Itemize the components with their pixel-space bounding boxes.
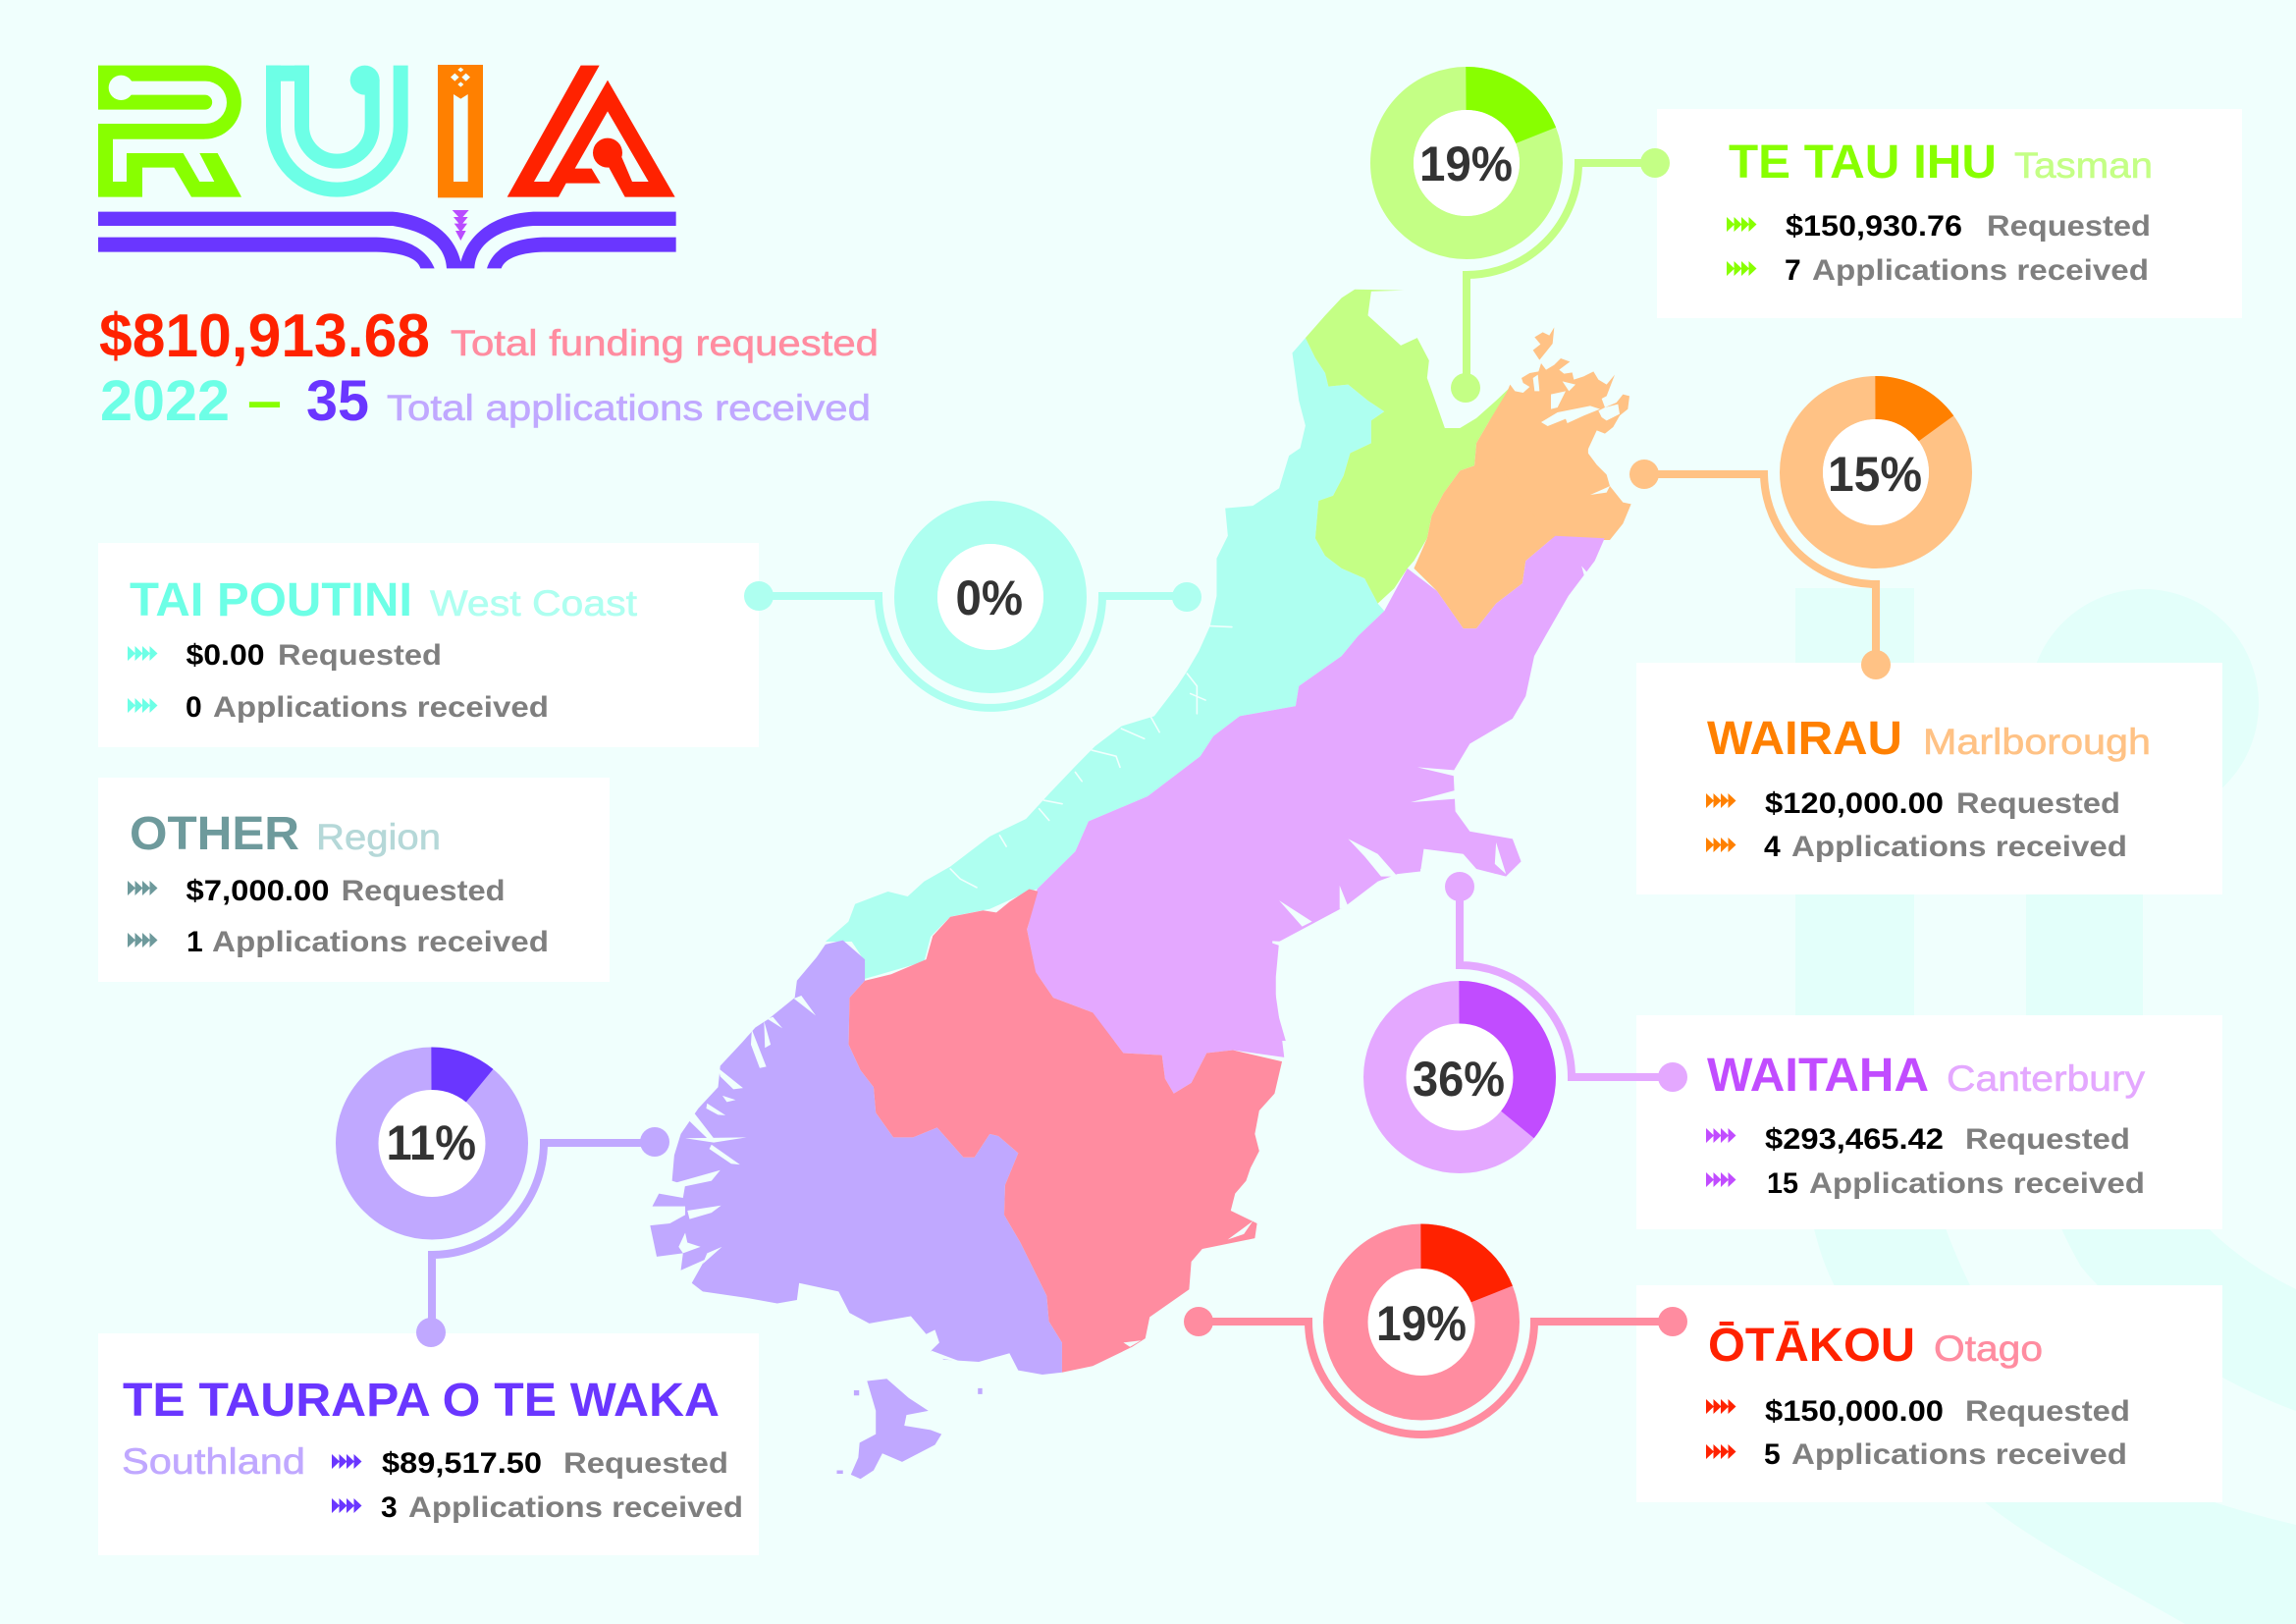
heading [130, 574, 638, 626]
connector [416, 1127, 669, 1347]
heading: OTHER [130, 808, 299, 860]
heading [1729, 136, 2153, 189]
heading: WAIRAU [1707, 713, 1902, 765]
stat: requested [128, 875, 506, 907]
logo book [98, 210, 676, 268]
stat: applications [1706, 1167, 2145, 1200]
heading: Canterbury [1947, 1058, 2146, 1099]
stat: applications: Applications received [1809, 1167, 2145, 1200]
panel: Te Tau Ihu [1657, 109, 2242, 318]
stat: applications: 5 [1764, 1438, 1781, 1471]
stat: requested: Requested [342, 875, 506, 907]
heading [130, 808, 441, 860]
connector [1184, 1307, 1687, 1435]
stat: requested [128, 639, 442, 672]
background pale bands [1795, 588, 2296, 1624]
total funding line: Total funding requested [451, 323, 879, 363]
donut: Tai Poutini 0%: 0% [956, 570, 1023, 625]
stat: applications: 3 [381, 1491, 398, 1524]
stat: requested [1706, 787, 2120, 820]
stat: requested [332, 1447, 728, 1480]
donut: Wairau 15%: 15% [1828, 447, 1922, 502]
stat: applications: 1 [187, 926, 203, 958]
stat: requested [1706, 1123, 2130, 1156]
connector [1445, 872, 1687, 1092]
donut: Wairau 15% [1629, 398, 1950, 679]
stat: requested: $7,000.00 [187, 875, 330, 907]
stat: applications: 7 [1785, 254, 1801, 287]
donut: Te Taurapa 11%: 11% [387, 1115, 476, 1170]
stat: applications: Applications received [212, 926, 549, 958]
region: Southland [650, 941, 1062, 1479]
region name: Southland [122, 1441, 305, 1482]
Stewart Island [836, 1379, 983, 1479]
stat: requested [1727, 210, 2151, 243]
logo letter R [98, 66, 241, 197]
heading: West Coast [430, 583, 638, 623]
stat: requested: Requested [278, 639, 442, 672]
region: Tasman [1306, 290, 1510, 604]
donut: Tai Poutini 0% [744, 522, 1201, 708]
region: Marlborough [1414, 327, 1631, 628]
stat: requested: Requested [1956, 787, 2120, 820]
total applications line: 2022 [100, 369, 230, 433]
heading: Otago [1934, 1328, 2043, 1369]
stat: applications: 4 [1764, 831, 1781, 863]
heading [1707, 713, 2151, 765]
heading: TAI POUTINI [130, 574, 412, 626]
connector [1629, 460, 1891, 679]
donut: Te Tau Ihu 19%: 19% [1419, 136, 1513, 191]
logo: RUIA [98, 65, 676, 268]
stat: requested: Requested [1965, 1123, 2130, 1156]
total applications line: 35 [306, 369, 369, 433]
panel: Waitaha [1636, 1015, 2222, 1229]
donut: Waitaha 36%: 36% [1413, 1052, 1505, 1107]
panel: Te Taurapa o te Waka [98, 1333, 759, 1555]
heading [1707, 1050, 2146, 1102]
stat: requested: $89,517.50 [382, 1447, 542, 1480]
heading: Region [316, 817, 441, 857]
stat: applications: Applications received [1791, 1438, 2127, 1471]
total funding line: $810,913.68 [99, 302, 430, 370]
stat: applications: Applications received [1791, 831, 2127, 863]
stat: applications: Applications received [408, 1491, 743, 1524]
heading [1708, 1320, 2043, 1372]
connector [1451, 148, 1670, 403]
stat: requested: $150,000.00 [1765, 1395, 1944, 1428]
donut: Otakou 19%: 19% [1376, 1296, 1467, 1351]
stat: requested: $0.00 [187, 639, 265, 672]
stat: requested: Requested [1965, 1395, 2130, 1428]
heading: ŌTĀKOU [1708, 1320, 1915, 1372]
stat: requested: $150,930.76 [1786, 210, 1962, 243]
donut: Otakou 19% [1184, 1247, 1687, 1435]
region: West Coast [826, 338, 1384, 979]
panel: Other [98, 778, 610, 982]
stat: requested: $120,000.00 [1765, 787, 1944, 820]
stat: requested: Requested [563, 1447, 728, 1480]
stat: applications: 0 [186, 691, 202, 724]
logo letter A [507, 66, 675, 197]
stat: requested: $293,465.42 [1765, 1123, 1944, 1156]
heading: Marlborough [1923, 722, 2151, 762]
stat: requested [1706, 1395, 2130, 1428]
total applications line: – [247, 369, 282, 433]
stat: requested: Requested [1987, 210, 2151, 243]
heading: TE TAU IHU [1729, 136, 1997, 189]
total funding line [99, 302, 879, 370]
total applications line [100, 369, 871, 433]
donut: Waitaha 36% [1385, 872, 1687, 1152]
logo letter I [438, 65, 483, 197]
region: Canterbury [1027, 536, 1605, 1094]
panel: Tai Poutini [98, 543, 759, 747]
panel: Otakou [1636, 1285, 2222, 1502]
logo letter U [266, 66, 400, 189]
heading: Tasman [2014, 145, 2153, 186]
heading: WAITAHA [1707, 1050, 1929, 1102]
donut: Te Taurapa 11% [357, 1068, 669, 1347]
total applications line: Total applications received [387, 388, 871, 428]
donut: Te Tau Ihu 19% [1392, 88, 1670, 403]
connector [744, 581, 1201, 708]
map: South Island [650, 290, 1631, 1479]
stat: applications: Applications received [1812, 254, 2149, 287]
stat: applications: Applications received [213, 691, 549, 724]
region: Otago [849, 890, 1282, 1373]
heading: TE TAURAPA O TE WAKA [123, 1375, 720, 1427]
stat: applications: 15 [1767, 1167, 1798, 1200]
panel: Wairau [1636, 663, 2222, 894]
